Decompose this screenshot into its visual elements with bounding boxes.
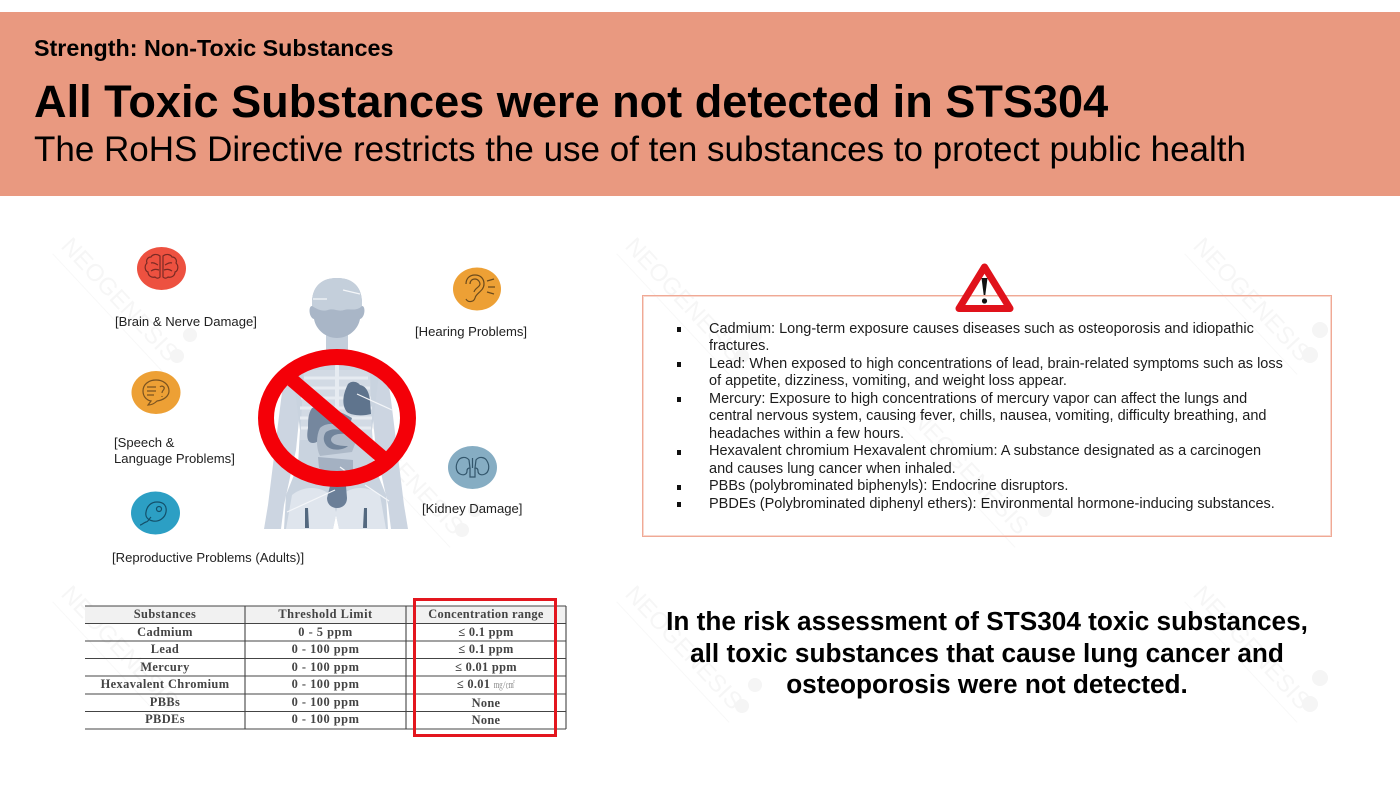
column: substances: Lead [151,642,179,656]
column: concentration range: None [472,696,500,710]
watermark: NEOGENESIS [620,581,748,715]
icon: ear [453,268,501,310]
column: threshold limit: 0 - 100 ppm [292,642,359,656]
column: concentration range: None [472,713,500,727]
table header shading [85,606,566,623]
subtitle: The RoHS Directive restricts the use of ten substances to protect public health [34,130,1246,169]
column: threshold limit [278,607,373,726]
column: substances: PBBs [150,695,180,709]
column: threshold limit: 0 - 5 ppm [298,625,353,639]
watermark: NEOGENESIS [341,406,469,540]
bullet: hexavalent chromium [677,450,681,455]
column: concentration range: Concentration range [428,607,544,621]
text: cadmium line 2: fractures. [709,338,769,354]
column: threshold limit: 0 - 100 ppm [292,712,359,726]
toxic substances list [677,320,1283,512]
text: PBBs: PBBs (polybrominated biphenyls): Endocrine disruptors. [709,478,1068,494]
column: substances: PBDEs [145,712,185,726]
text: mercury line 1: Mercury: Exposure to high concentrations of mercury vapor can affect the lungs and [709,390,1247,406]
substances table [85,606,567,730]
conclusion text: osteoporosis were not detected. [786,669,1188,699]
conclusion text: In the risk assessment of STS304 toxic substances, [666,606,1308,636]
watermark: NEOGENESIS [56,581,184,715]
column: substances: Cadmium [137,625,193,639]
label: kidney damage: [Kidney Damage] [422,501,522,516]
bullet: PBDEs [677,502,681,507]
icon: reproductive cell [131,492,180,534]
column: substances: Hexavalent Chromium [101,677,229,691]
eyebrow heading: Strength: Non-Toxic Substances [34,35,393,61]
title: All Toxic Substances were not detected in STS304 [34,76,1108,127]
text: hexavalent chromium line 2: and causes lung cancer when inhaled. [709,460,956,476]
watermark: NEOGENESIS [56,233,184,367]
text: lead line 1: Lead: When exposed to high concentrations of lead, brain-related symptoms such as loss [709,356,1283,372]
column: substances [100,607,229,726]
text: mercury line 2: central nervous system, causing fever, chills, nausea, vomiting, difficulty breathing, and [709,408,1266,424]
column: concentration range: ≤ 0.1 ppm [458,642,514,656]
table grid [85,606,567,730]
watermark: NEOGENESIS [906,406,1034,540]
bullet: cadmium [677,327,681,332]
icon: brain [137,247,186,290]
conclusion text: all toxic substances that cause lung cancer and [690,638,1284,668]
icon: warning triangle [956,264,1014,312]
column: concentration range: ≤ 0.01 ppm [455,660,517,674]
bullet: PBBs [677,485,681,490]
icon: speech bubble [132,371,180,414]
column: threshold limit: 0 - 100 ppm [292,660,359,674]
watermark: NEOGENESIS [1188,233,1316,367]
label: speech and language problems [114,435,235,466]
label: speech and language problems: Language Problems] [114,451,235,466]
icon: kidney [448,446,497,489]
column: threshold limit: 0 - 100 ppm [292,695,359,709]
organs [343,382,371,415]
text: cadmium line 1: Cadmium: Long-term exposure causes diseases such as osteoporosis and idiopathic [709,320,1254,336]
text: PBDEs: PBDEs (Polybrominated diphenyl ethers): Environmental hormone-inducing substances. [709,496,1275,512]
column: concentration range: ≤ 0.1 ppm [458,625,514,639]
label: brain and nerve damage: [Brain & Nerve Damage] [115,314,257,329]
column: threshold limit: 0 - 100 ppm [292,677,359,691]
watermark: NEOGENESIS [1188,581,1316,715]
bullet: lead [677,362,681,367]
red highlight rectangle [413,598,557,737]
text: hexavalent chromium line 1: Hexavalent chromium Hexavalent chromium: A substance designated as a carcinogen [709,443,1261,459]
watermark: NEOGENESIS [620,233,748,367]
label: hearing problems: [Hearing Problems] [415,324,527,339]
text: mercury line 3: headaches within a few hours. [709,426,904,442]
label: speech and language problems: [Speech & [114,435,174,450]
column: threshold limit: Threshold Limit [278,607,373,621]
conclusion text [666,606,1308,699]
column: substances: Mercury [140,660,190,674]
warning box [642,295,1332,537]
pointer lines [287,290,392,512]
body silhouette [264,278,408,529]
column: substances: Substances [134,607,196,621]
header banner [0,12,1400,196]
label: reproductive problems: [Reproductive Problems (Adults)] [112,550,304,565]
prohibition sign [266,357,408,479]
human body diagram with prohibition sign [258,278,416,529]
text: lead line 2: of appetite, dizziness, vomiting, and weight loss appear. [709,373,1067,389]
bullet: mercury [677,397,681,402]
column: concentration range: ≤ 0.01 ㎎/㎠ [457,677,515,691]
column: concentration range [428,607,544,727]
